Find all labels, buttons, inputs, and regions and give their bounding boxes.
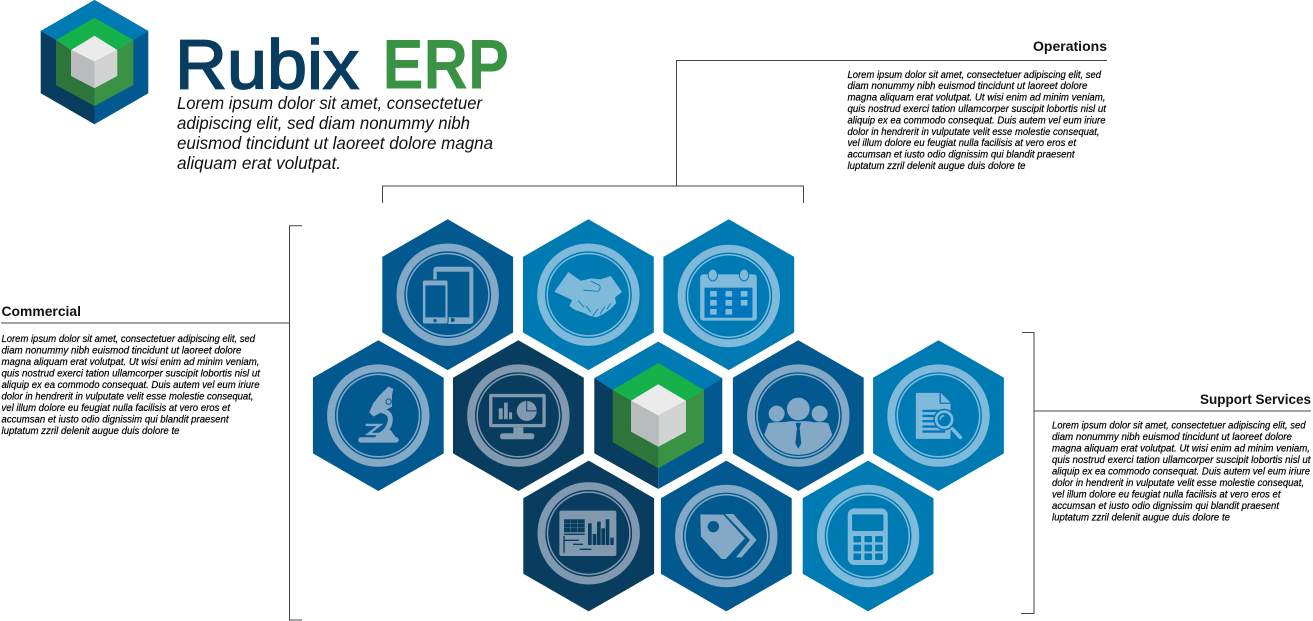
text block: Operations <box>848 70 1107 172</box>
heading: Operations: Operations <box>1033 39 1107 54</box>
connector: support services bracket <box>1021 332 1311 614</box>
icon: team of people <box>764 398 832 455</box>
text block: Commercial: diam nonummy nibh euismod tincidunt ut laoreet dolore <box>2 345 242 356</box>
intro text block: aliquam erat volutpat. <box>177 153 341 173</box>
text block: Commercial: luptatum zzril delenit augue duis dolore te <box>2 426 180 437</box>
text block: Operations: aliquip ex ea commodo consequat. Duis autem vel eum iriure <box>848 115 1106 126</box>
text block: Operations: luptatum zzril delenit augue duis dolore te <box>848 161 1026 172</box>
text block: Support Services: dolor in hendrerit in vulputate velit esse molestie consequat, <box>1052 478 1304 489</box>
text block: Commercial <box>2 334 261 437</box>
intro text block <box>177 93 493 173</box>
text block: Support Services: luptatum zzril delenit augue duis dolore te <box>1052 512 1230 523</box>
icon: monitor <box>489 394 546 439</box>
hexagon: calculator <box>803 461 934 611</box>
text block: Commercial: quis nostrud exerci tation ullamcorper suscipit lobortis nisl ut <box>2 368 261 379</box>
text block: Operations: diam nonummy nibh euismod tincidunt ut laoreet dolore <box>848 81 1088 92</box>
icon: tags <box>700 514 757 559</box>
hexagon: price tags <box>661 461 792 611</box>
text block: Operations: magna aliquam erat volutpat. Ut wisi enim ad minim veniam, <box>848 93 1106 104</box>
logo: hexagonal cube <box>41 0 148 124</box>
text block: Support Services <box>1052 420 1312 523</box>
text block: Commercial: aliquip ex ea commodo consequat. Duis autem vel eum iriure <box>2 380 260 391</box>
intro text block: Lorem ipsum dolor sit amet, consectetuer <box>177 93 483 113</box>
text block: Operations: quis nostrud exerci tation ullamcorper suscipit lobortis nisl ut <box>848 104 1107 115</box>
intro text block: euismod tincidunt ut laoreet dolore magna <box>177 133 493 153</box>
text block: Support Services: vel illum dolore eu feugiat nulla facilisis at vero eros et <box>1052 489 1282 500</box>
text block: Commercial: dolor in hendrerit in vulputate velit esse molestie consequat, <box>2 391 254 402</box>
text block: Support Services: magna aliquam erat volutpat. Ut wisi enim ad minim veniam, <box>1052 443 1310 454</box>
icon: gantt and bar chart board <box>559 511 616 556</box>
title: Rubix ERP: ERP <box>382 25 509 104</box>
text block: Support Services: quis nostrud exerci tation ullamcorper suscipit lobortis nisl ut <box>1052 455 1312 466</box>
hexagon: handshake <box>523 219 654 370</box>
text block: Commercial: Lorem ipsum dolor sit amet, consectetuer adipiscing elit, sed <box>2 334 255 345</box>
heading: Support Services: Support Services <box>1200 392 1311 407</box>
text block: Operations: accumsan et iusto odio dignissim qui blandit praesent <box>848 150 1076 161</box>
hexagon: people <box>733 340 864 491</box>
intro text block: adipiscing elit, sed diam nonummy nibh <box>177 113 470 133</box>
connector: commercial bracket <box>1 226 302 620</box>
connector: operations bracket <box>382 60 1107 203</box>
icon: document with magnifier <box>916 393 960 439</box>
text block: Operations: dolor in hendrerit in vulputate velit esse molestie consequat, <box>848 127 1100 138</box>
hexagon: central cube logo <box>594 342 722 489</box>
title: Rubix ERP: Rubix <box>175 25 359 103</box>
text block: Commercial: vel illum dolore eu feugiat nulla facilisis at vero eros et <box>2 403 231 414</box>
icon: calendar <box>700 269 757 321</box>
icon: calculator <box>848 508 888 565</box>
hexagon: calendar <box>663 219 794 370</box>
hexagon: gantt report <box>523 461 654 611</box>
heading: Commercial: Commercial <box>2 304 81 319</box>
hexagon: document search <box>873 340 1004 491</box>
icon: microscope <box>358 387 399 443</box>
text block: Operations: vel illum dolore eu feugiat nulla facilisis at vero eros et <box>848 138 1077 149</box>
hexagon: devices <box>382 219 513 370</box>
text block: Operations: Lorem ipsum dolor sit amet, consectetuer adipiscing elit, sed <box>848 70 1101 81</box>
hexagon: monitor with charts <box>453 340 584 491</box>
text block: Support Services: Lorem ipsum dolor sit amet, consectetuer adipiscing elit, sed <box>1052 420 1306 431</box>
title: Rubix ERP <box>175 25 509 104</box>
text block: Support Services: diam nonummy nibh euismod tincidunt ut laoreet dolore <box>1052 432 1292 443</box>
text block: Support Services: accumsan et iusto odio dignissim qui blandit praesent <box>1052 501 1280 512</box>
text block: Commercial: magna aliquam erat volutpat. Ut wisi enim ad minim veniam, <box>2 357 260 368</box>
icon: tablet and phone <box>422 267 473 324</box>
icon: handshake <box>554 272 622 317</box>
hexagon: microscope <box>313 340 444 491</box>
text block: Commercial: accumsan et iusto odio dignissim qui blandit praesent <box>2 414 230 425</box>
